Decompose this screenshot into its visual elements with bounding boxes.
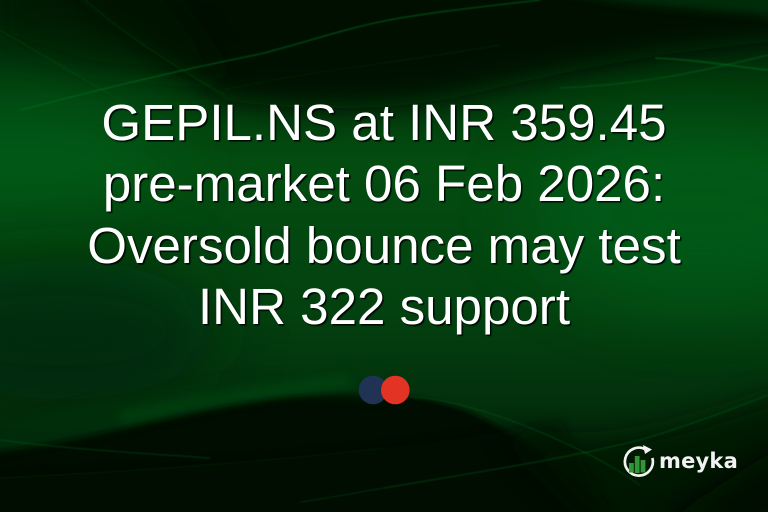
loading dots [358,376,410,404]
title: GEPIL.NS at INR 359.45 [101,94,667,151]
logo icon [624,445,654,477]
dot: red [381,376,410,404]
title: INR 322 support [198,278,570,335]
title: Oversold bounce may test [87,217,681,274]
bottom dark sweep [0,393,640,512]
title [87,94,682,336]
logo: meyka [624,445,738,477]
title: pre-market 06 Feb 2026: [103,155,665,212]
top dark sweep [50,0,768,108]
logo wordmark: meyka [659,449,738,473]
dot: navy [359,376,387,404]
